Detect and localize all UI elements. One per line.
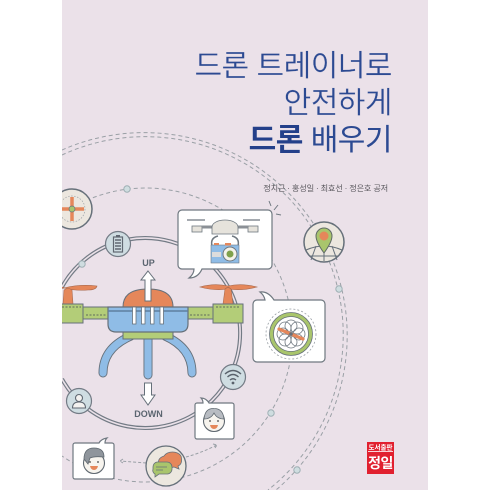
cover illustration [40, 133, 347, 490]
speech bubble: woman face [195, 398, 234, 439]
title: 드론 배우기 [249, 124, 392, 157]
speech bubble: camera drone [178, 201, 281, 278]
title: 안전하게 [284, 87, 392, 120]
icon: drone top view [62, 188, 93, 230]
title [194, 50, 392, 157]
publisher logo [367, 442, 394, 474]
orbit dots [79, 186, 342, 473]
arms and motors [60, 304, 243, 323]
icon: chat [146, 446, 186, 486]
down label: DOWN [134, 409, 163, 419]
icon: battery [106, 232, 130, 256]
orange dome [123, 289, 173, 307]
blue body [108, 307, 188, 332]
body slits [132, 307, 164, 324]
up arrow [141, 271, 155, 301]
rotors [40, 285, 257, 304]
icon: wifi [220, 364, 246, 390]
icon: location pin [304, 222, 344, 262]
publisher logo: 도서출판 [369, 442, 392, 452]
dashed arrows between faces [120, 444, 217, 463]
title: 드론 트레이너로 [194, 50, 392, 83]
dashed arm seams [62, 307, 240, 315]
drone [40, 285, 257, 375]
down arrow [141, 383, 155, 405]
icon: person [66, 388, 92, 414]
up label: UP [142, 258, 155, 268]
speech bubble: man face [73, 438, 114, 479]
inner solid ring [62, 238, 240, 428]
speech bubble: propeller [253, 292, 325, 362]
outer dashed orbits [62, 133, 347, 490]
authors: 정치근 · 홍성일 · 최효선 · 정은호 공저 [263, 183, 388, 193]
publisher logo: 정일 [368, 455, 393, 471]
book cover background [62, 0, 428, 490]
green underside [122, 332, 174, 340]
legs [103, 336, 192, 375]
middle dashed orbit [62, 188, 292, 482]
